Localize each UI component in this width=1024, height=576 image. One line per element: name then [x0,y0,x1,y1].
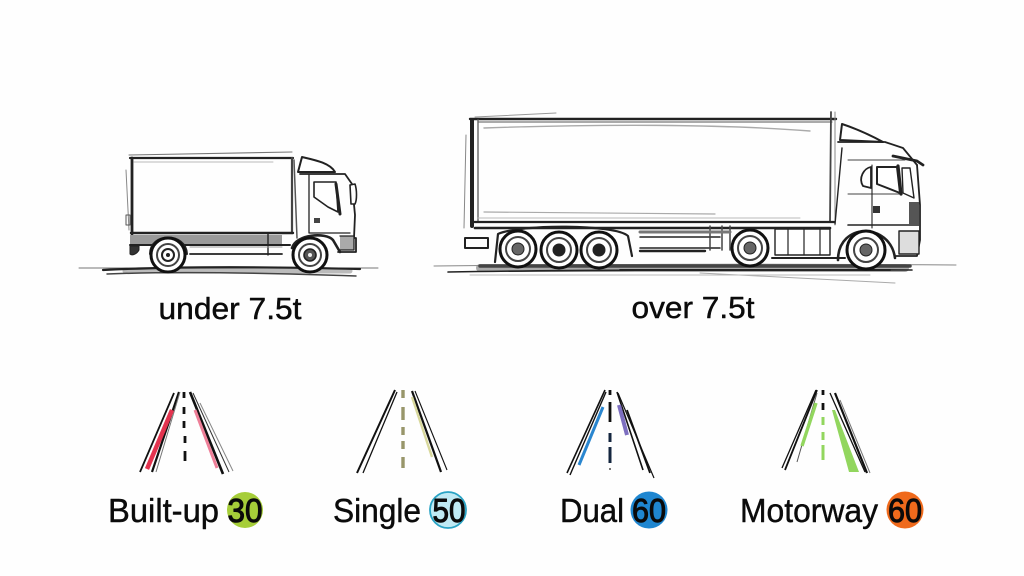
speed limit: dual 60 [560,492,668,529]
speed limit: single 50 [333,492,466,529]
chassis band [130,233,290,255]
label: over 7.5t: over 7.5t [632,290,755,325]
speed limit: built-up 30: 30 [228,492,262,529]
cargo box [464,112,836,228]
ground shadow [434,264,956,283]
speed limit: motorway 60: 60 [888,492,922,529]
illustration: truck under 7.5t [79,152,378,276]
speed limit: dual 60: Dual [560,492,624,529]
speed limit: single 50: Single [333,492,421,529]
illustration: truck over 7.5t [434,112,956,283]
speed limit: dual 60: 60 [632,492,666,529]
front wheel [293,238,327,272]
label: under 7.5t: under 7.5t [158,291,302,326]
wheels [500,230,885,269]
speed limit: motorway 60: Motorway [740,492,878,529]
road icon: built-up [140,392,233,474]
ground shadow [79,267,378,276]
cab [835,124,923,260]
cab [292,157,356,252]
chassis [465,226,845,262]
road icon: motorway [782,390,870,473]
road icon: dual [567,390,654,478]
speed limit: single 50: 50 [432,492,466,529]
cargo box [126,152,293,234]
road icon: single [357,390,447,473]
speed limit: built-up 30: Built-up [108,492,219,529]
rear wheel [150,238,187,272]
